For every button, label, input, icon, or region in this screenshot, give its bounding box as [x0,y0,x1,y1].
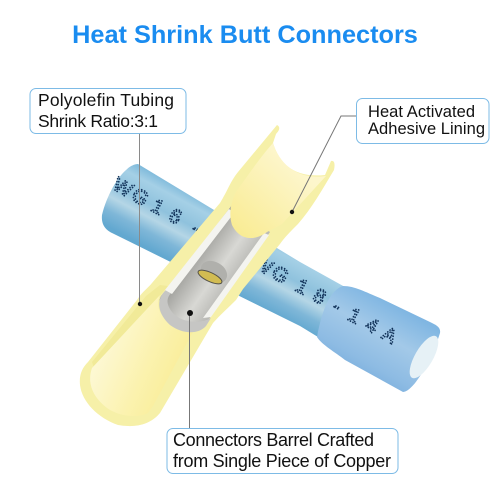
leader line [138,134,140,304]
tube opening [404,332,444,382]
barrel slot bump [197,256,231,288]
yellow connector [80,125,335,426]
blue tube body [102,164,345,337]
leader line [188,313,190,428]
printed marking: left: WG16- [109,174,204,240]
white strip left [165,209,234,294]
yellow lower interior [90,295,194,416]
copper barrel channel [159,205,270,327]
yellow darker band [92,285,168,368]
label text: from Single Piece of Copper [173,451,391,471]
leader line [292,116,357,212]
barrel ring [159,290,211,332]
callout: copper barrel [167,310,398,474]
label text: Adhesive Lining [368,120,485,138]
white strip right [203,233,269,318]
anchor dot [138,302,142,306]
label box [167,428,398,474]
callout: polyolefin tubing [30,88,186,306]
printed marking: right: WG18-14A [249,251,401,349]
callout: adhesive lining [290,98,489,214]
label box [356,98,489,144]
barrel slot [196,267,224,287]
blue collar [317,286,440,392]
anchor dot [187,310,193,316]
title: Heat Shrink Butt Connectors [72,21,418,49]
yellow cup interior [230,143,326,238]
label text: Heat Activated [368,103,475,121]
label text: Shrink Ratio:3:1 [38,111,158,131]
label text: Polyolefin Tubing [38,90,174,110]
blue connector [102,164,444,392]
label box [30,88,186,134]
label text: Connectors Barrel Crafted [173,430,374,450]
anchor dot [290,210,294,214]
yellow sleeve outer [80,125,335,426]
